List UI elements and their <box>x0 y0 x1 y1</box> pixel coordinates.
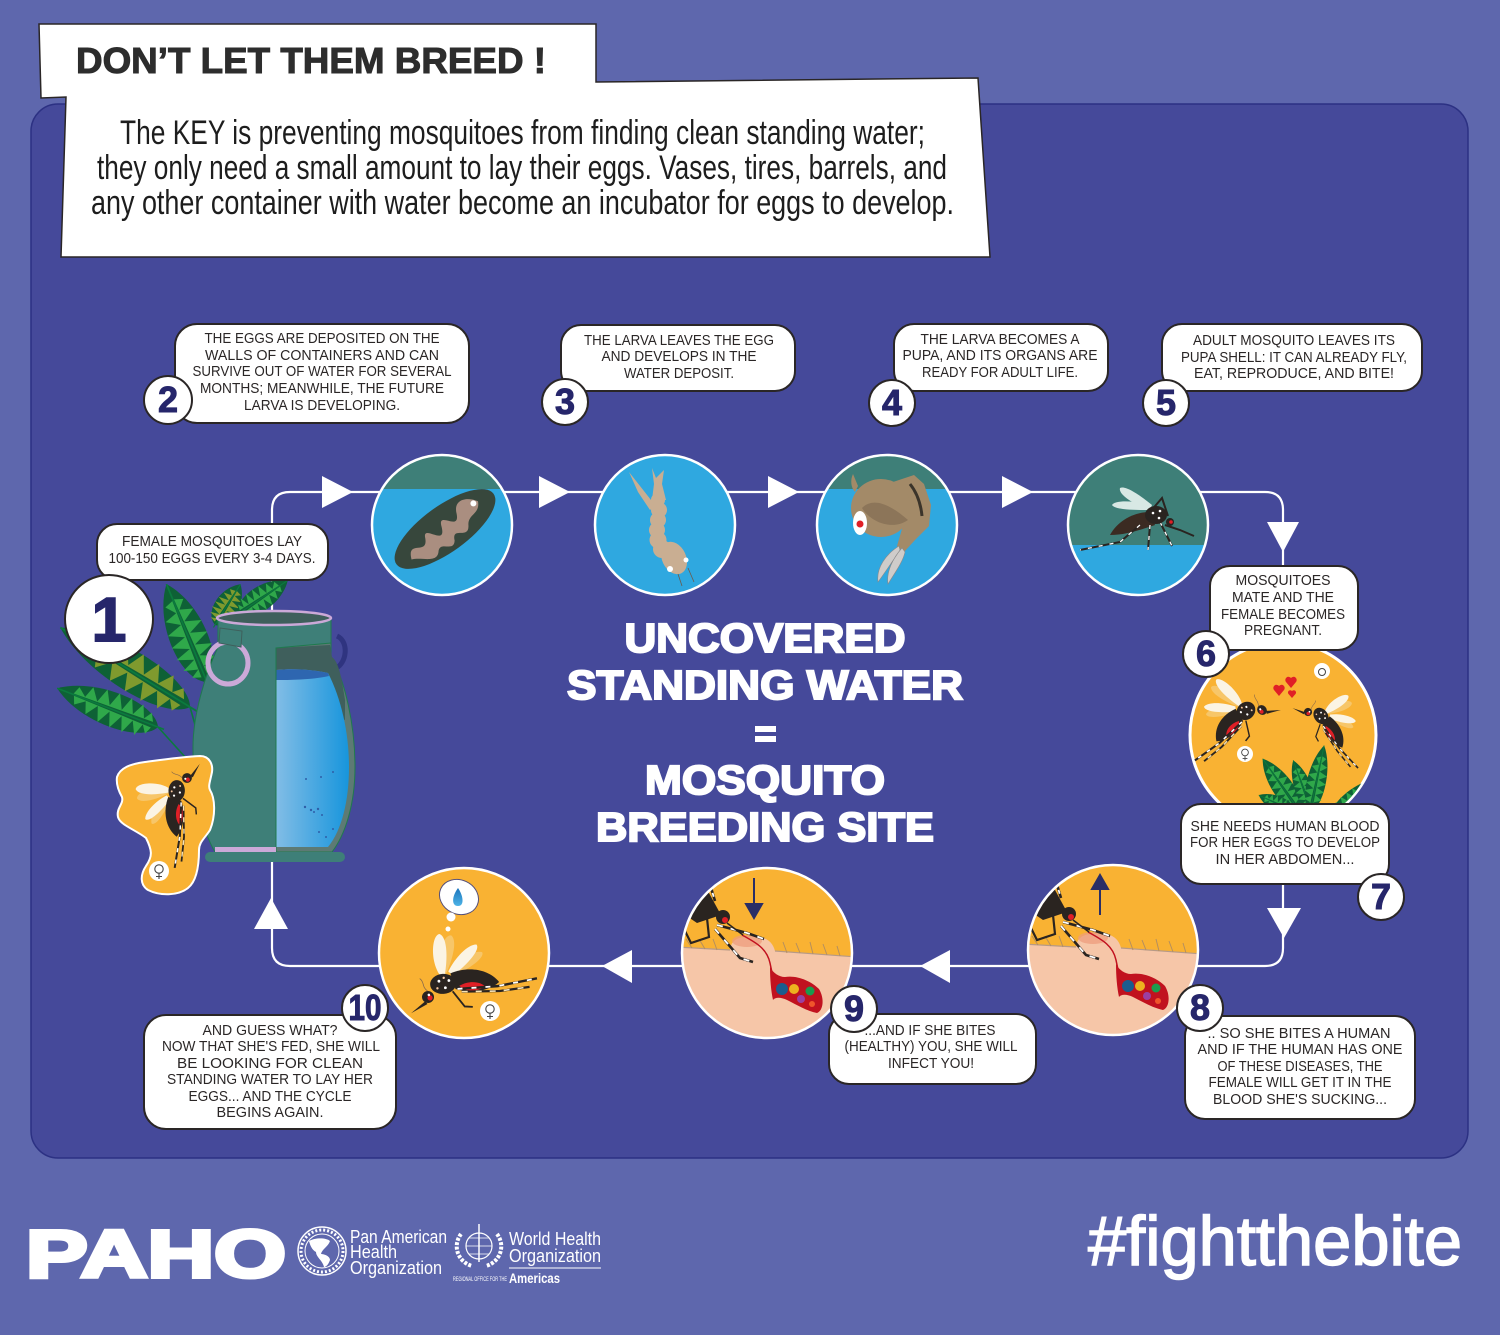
step 1 badge <box>65 575 153 663</box>
circle: mating mosquitoes <box>1188 651 1378 803</box>
step 7 callout: FOR HER EGGS TO DEVELOP <box>1190 834 1380 851</box>
step 6 callout: MOSQUITOES <box>1236 572 1330 589</box>
step 5 callout: PUPA SHELL: IT CAN ALREADY FLY, <box>1181 349 1407 366</box>
arrow down <box>746 878 762 918</box>
leaves behind jar <box>50 570 295 768</box>
PAHO name: Organization <box>350 1258 442 1278</box>
mosquito <box>133 761 200 869</box>
water <box>276 669 349 847</box>
intro text <box>91 114 954 222</box>
step 1 callout: FEMALE MOSQUITOES LAY <box>122 533 302 550</box>
step 9 callout: ...AND IF SHE BITES <box>864 1022 996 1039</box>
step 2 callout: LARVA IS DEVELOPING. <box>244 397 400 414</box>
larva <box>629 468 692 578</box>
step 8 callout: AND IF THE HUMAN HAS ONE <box>1198 1041 1402 1058</box>
step 10 callout: BE LOOKING FOR CLEAN <box>177 1055 363 1072</box>
step 4 callout: THE LARVA BECOMES A <box>920 331 1080 348</box>
step 8 callout: FEMALE WILL GET IT IN THE <box>1208 1074 1392 1091</box>
step 10 callout: NOW THAT SHE'S FED, SHE WILL <box>162 1038 380 1055</box>
step 5 badge <box>1143 380 1189 426</box>
step 4 callout <box>894 324 1108 391</box>
ring handle <box>208 642 248 684</box>
step 5 callout <box>1162 324 1422 391</box>
step 3 badge: 3 <box>555 381 575 422</box>
step 2 callout: THE EGGS ARE DEPOSITED ON THE <box>204 330 440 347</box>
step 3 callout <box>561 325 795 391</box>
step 8 badge: 8 <box>1190 987 1210 1028</box>
circle: larva <box>595 455 735 595</box>
step 3 callout: AND DEVELOPS IN THE <box>602 348 756 365</box>
egg <box>383 475 507 583</box>
intro text: they only need a small amount to lay their eggs. Vases, tires, barrels, and <box>97 149 947 187</box>
rim <box>217 611 331 625</box>
adult mosquito <box>1080 487 1194 550</box>
PAHO wordmark: PAHO <box>26 1217 286 1292</box>
center message: BREEDING SITE <box>596 804 934 850</box>
step 9 callout: (HEALTHY) YOU, SHE WILL <box>844 1038 1018 1055</box>
step 8 callout <box>1185 1016 1415 1119</box>
step 3 callout: THE LARVA LEAVES THE EGG <box>584 332 774 349</box>
step 2 callout <box>175 324 469 423</box>
logo: PAHO emblem <box>298 1227 346 1275</box>
step 2 badge <box>144 376 192 424</box>
larvae specks <box>304 771 334 838</box>
female symbol <box>480 1001 500 1021</box>
main panel <box>31 104 1468 1158</box>
hashtag: #fightthebite <box>1088 1202 1462 1280</box>
circle: mosquito infects human <box>675 868 857 1043</box>
step 9 callout <box>829 1014 1036 1084</box>
step 6 callout <box>1210 566 1358 650</box>
PAHO name: Pan American <box>350 1227 447 1247</box>
step 7 callout <box>1181 804 1389 884</box>
center message: UNCOVERED <box>624 615 906 661</box>
barrel left body <box>193 618 331 852</box>
female symbol <box>149 861 169 881</box>
step 2 callout: WALLS OF CONTAINERS AND CAN <box>205 347 439 364</box>
header panel <box>39 24 990 257</box>
step 3 badge <box>542 379 588 425</box>
step 10 badge: 10 <box>348 987 382 1028</box>
arrow up <box>1092 875 1108 915</box>
step 1 callout <box>97 524 328 580</box>
PAHO name: Health <box>350 1242 397 1262</box>
PAHO name <box>350 1227 447 1278</box>
step 4 badge: 4 <box>882 382 902 423</box>
circle: mosquito picks up disease <box>1021 865 1203 1040</box>
intro text: any other container with water become an incubator for eggs to develop. <box>91 184 954 222</box>
step 6 callout: MATE AND THE <box>1232 589 1334 606</box>
step 5 callout: EAT, REPRODUCE, AND BITE! <box>1194 365 1394 382</box>
step 1 badge: 1 <box>92 586 126 655</box>
left female mosquito <box>1164 662 1281 776</box>
step 8 callout: BLOOD SHE'S SUCKING... <box>1213 1091 1387 1108</box>
step 6 badge: 6 <box>1196 633 1216 674</box>
step 6 badge <box>1183 631 1229 677</box>
WHO name <box>453 1229 601 1286</box>
step 7 badge <box>1358 874 1404 920</box>
step 8 callout: OF THESE DISEASES, THE <box>1218 1058 1382 1075</box>
WHO name: Organization <box>509 1246 601 1266</box>
circle: egg <box>372 455 512 595</box>
step 7 callout: IN HER ABDOMEN... <box>1216 851 1354 868</box>
step 2 callout: SURVIVE OUT OF WATER FOR SEVERAL <box>192 363 452 380</box>
logo: WHO emblem <box>457 1224 501 1266</box>
step 3 callout: WATER DEPOSIT. <box>624 365 734 382</box>
water barrel <box>193 611 355 862</box>
step 1 callout: 100-150 EGGS EVERY 3-4 DAYS. <box>108 550 316 567</box>
intro text: The KEY is preventing mosquitoes from finding clean standing water; <box>120 114 925 152</box>
barrel right frame <box>276 618 355 852</box>
step 7 badge: 7 <box>1371 876 1391 917</box>
base <box>215 847 276 852</box>
right male mosquito <box>1293 677 1386 778</box>
step 2 callout: MONTHS; MEANWHILE, THE FUTURE <box>200 380 444 397</box>
step 10 callout: AND GUESS WHAT? <box>202 1022 338 1039</box>
center message: STANDING WATER <box>567 662 963 708</box>
center message: MOSQUITO <box>645 757 885 803</box>
WHO name: Americas <box>509 1270 560 1286</box>
step 10 callout <box>144 1015 396 1129</box>
title: DON’T LET THEM BREED ! <box>76 40 546 81</box>
circle: fed mosquito looks for water <box>379 868 549 1038</box>
step 9 badge: 9 <box>844 988 864 1029</box>
circle: pupa <box>817 455 957 595</box>
step 10 callout: BEGINS AGAIN. <box>216 1104 324 1121</box>
step 5 callout: ADULT MOSQUITO LEAVES ITS <box>1193 332 1395 349</box>
step 7 callout: SHE NEEDS HUMAN BLOOD <box>1190 818 1380 835</box>
step 9 badge <box>831 986 877 1032</box>
circle: adult mosquito on water <box>1068 455 1208 595</box>
step 4 callout: PUPA, AND ITS ORGANS ARE <box>902 347 1098 364</box>
WHO name: World Health <box>509 1229 601 1249</box>
step 6 callout: PREGNANT. <box>1244 622 1322 639</box>
lifecycle flow line <box>272 492 1283 966</box>
center message <box>567 615 963 850</box>
hearts <box>1273 677 1297 698</box>
pupa <box>851 474 931 584</box>
step 4 badge <box>869 380 915 426</box>
step 4 callout: READY FOR ADULT LIFE. <box>922 364 1078 381</box>
step 9 callout: INFECT YOU! <box>888 1055 974 1072</box>
step 8 callout: .. SO SHE BITES A HUMAN <box>1208 1025 1390 1042</box>
step 8 badge <box>1177 985 1223 1031</box>
flow arrows <box>254 476 1301 983</box>
mosquito <box>406 927 539 1013</box>
step 10 callout: EGGS... AND THE CYCLE <box>188 1088 352 1105</box>
step 2 badge: 2 <box>158 379 178 420</box>
male symbol <box>1314 663 1330 679</box>
step 5 badge: 5 <box>1156 382 1176 423</box>
thought bubble <box>434 873 484 932</box>
female symbol <box>1237 746 1253 762</box>
WHO name: REGIONAL OFFICE FOR THE <box>453 1276 507 1283</box>
female mosquito sticker <box>117 756 214 894</box>
step 10 callout: STANDING WATER TO LAY HER <box>167 1071 373 1088</box>
leaves <box>1258 745 1362 803</box>
step 6 callout: FEMALE BECOMES <box>1221 606 1345 623</box>
